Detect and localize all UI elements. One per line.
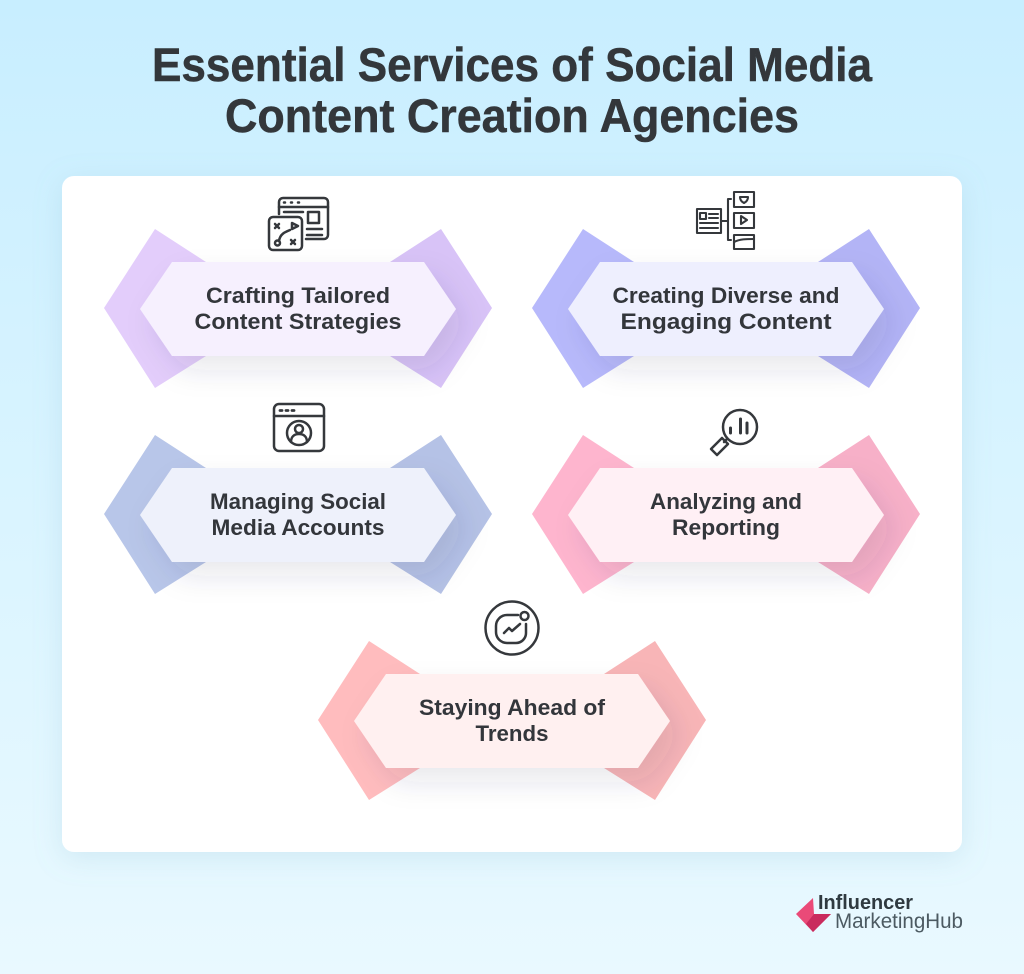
- logo: Influencer MarketingHub: Influencer: [818, 892, 913, 914]
- panel: Creating Diverse and Engaging Content: [532, 229, 920, 388]
- icon: logo diamond: [796, 898, 831, 932]
- panel: Creating Diverse and Engaging Content: Creating Diverse and: [612, 283, 840, 308]
- icon: content types: [697, 192, 754, 249]
- panel: Crafting Tailored Content Strategies: [104, 229, 492, 388]
- panel: Crafting Tailored Content Strategies: Crafting Tailored: [206, 283, 390, 308]
- panel: Staying Ahead of Trends: [318, 641, 706, 800]
- title: [152, 38, 873, 142]
- panel: Managing Social Media Accounts: Managing Social: [210, 489, 386, 514]
- panel: Analyzing and Reporting: [532, 435, 920, 594]
- panel: Staying Ahead of Trends: Staying Ahead of: [419, 695, 606, 720]
- panel: Staying Ahead of Trends: Trends: [476, 721, 548, 746]
- panel: Analyzing and Reporting: Analyzing and: [650, 489, 802, 514]
- title: Content Creation Agencies: [225, 89, 799, 142]
- title: Essential Services of Social Media: [152, 38, 873, 91]
- panel: Crafting Tailored Content Strategies: Content Strategies: [194, 309, 402, 334]
- logo: Influencer MarketingHub: [796, 892, 963, 933]
- icon: trend in rounded frame: [486, 602, 538, 654]
- panel: white card: [62, 176, 962, 852]
- icon: browser with user: [274, 404, 324, 451]
- icon: strategy map and browser: [269, 198, 328, 250]
- panel: Analyzing and Reporting: Reporting: [672, 515, 780, 540]
- panel: Managing Social Media Accounts: Media Accounts: [212, 515, 384, 540]
- logo: Influencer MarketingHub: MarketingHub: [835, 910, 963, 933]
- panel: Creating Diverse and Engaging Content: Engaging Content: [620, 309, 832, 334]
- panel: Managing Social Media Accounts: [104, 435, 492, 594]
- icon: magnifier with bars: [711, 410, 757, 455]
